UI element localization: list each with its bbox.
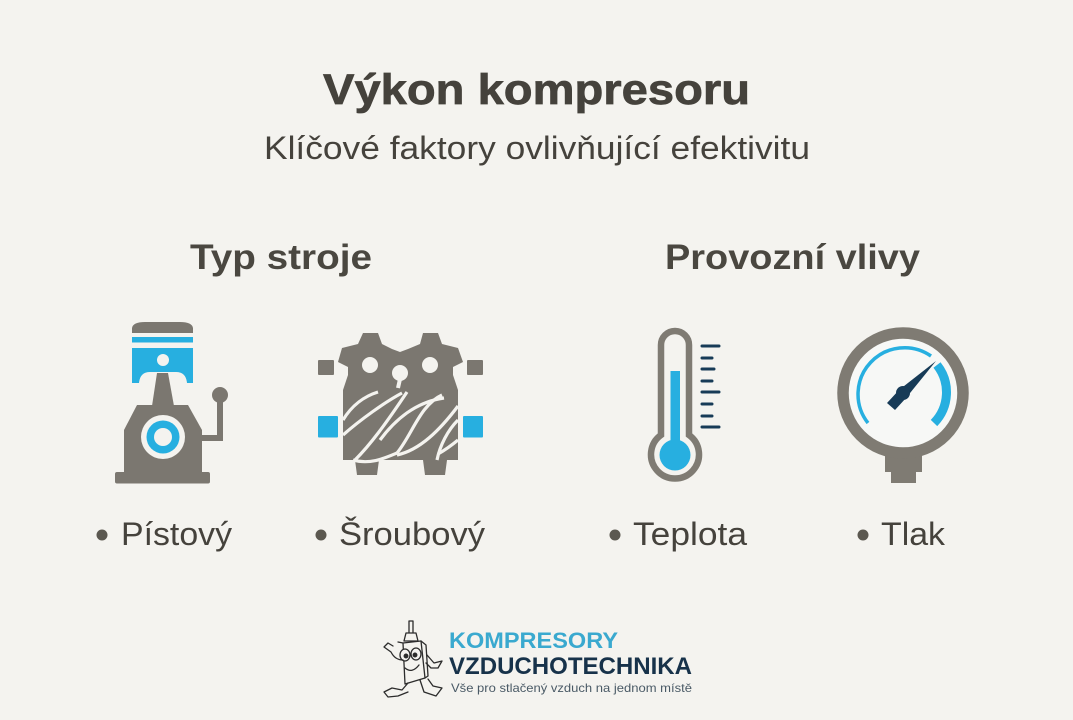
label: Tlak [858, 516, 946, 552]
label: Pístový: Pístový [121, 516, 232, 552]
icon: pressure gauge [843, 333, 963, 483]
heading: Typ stroje: Typ stroje [190, 238, 372, 277]
label: Teplota: Teplota [633, 516, 747, 552]
logo: KOMPRESORY wordmark: KOMPRESORY [449, 628, 618, 653]
icon: piston [115, 322, 228, 484]
title: Výkon kompresoru [323, 66, 750, 114]
logo: tagline: Vše pro stlačený vzduch na jednom místě [451, 681, 692, 695]
logo: mascot [384, 621, 442, 697]
icon: screw compressor [318, 333, 483, 475]
label: Šroubový: Šroubový [339, 516, 485, 552]
label: Tlak: Tlak [881, 516, 946, 552]
subtitle: Klíčové faktory ovlivňující efektivitu [264, 130, 810, 166]
icon: thermometer [651, 331, 719, 478]
logo: VZDUCHOTECHNIKA wordmark: VZDUCHOTECHNIKA [449, 653, 692, 680]
heading: Provozní vlivy: Provozní vlivy [665, 238, 921, 277]
